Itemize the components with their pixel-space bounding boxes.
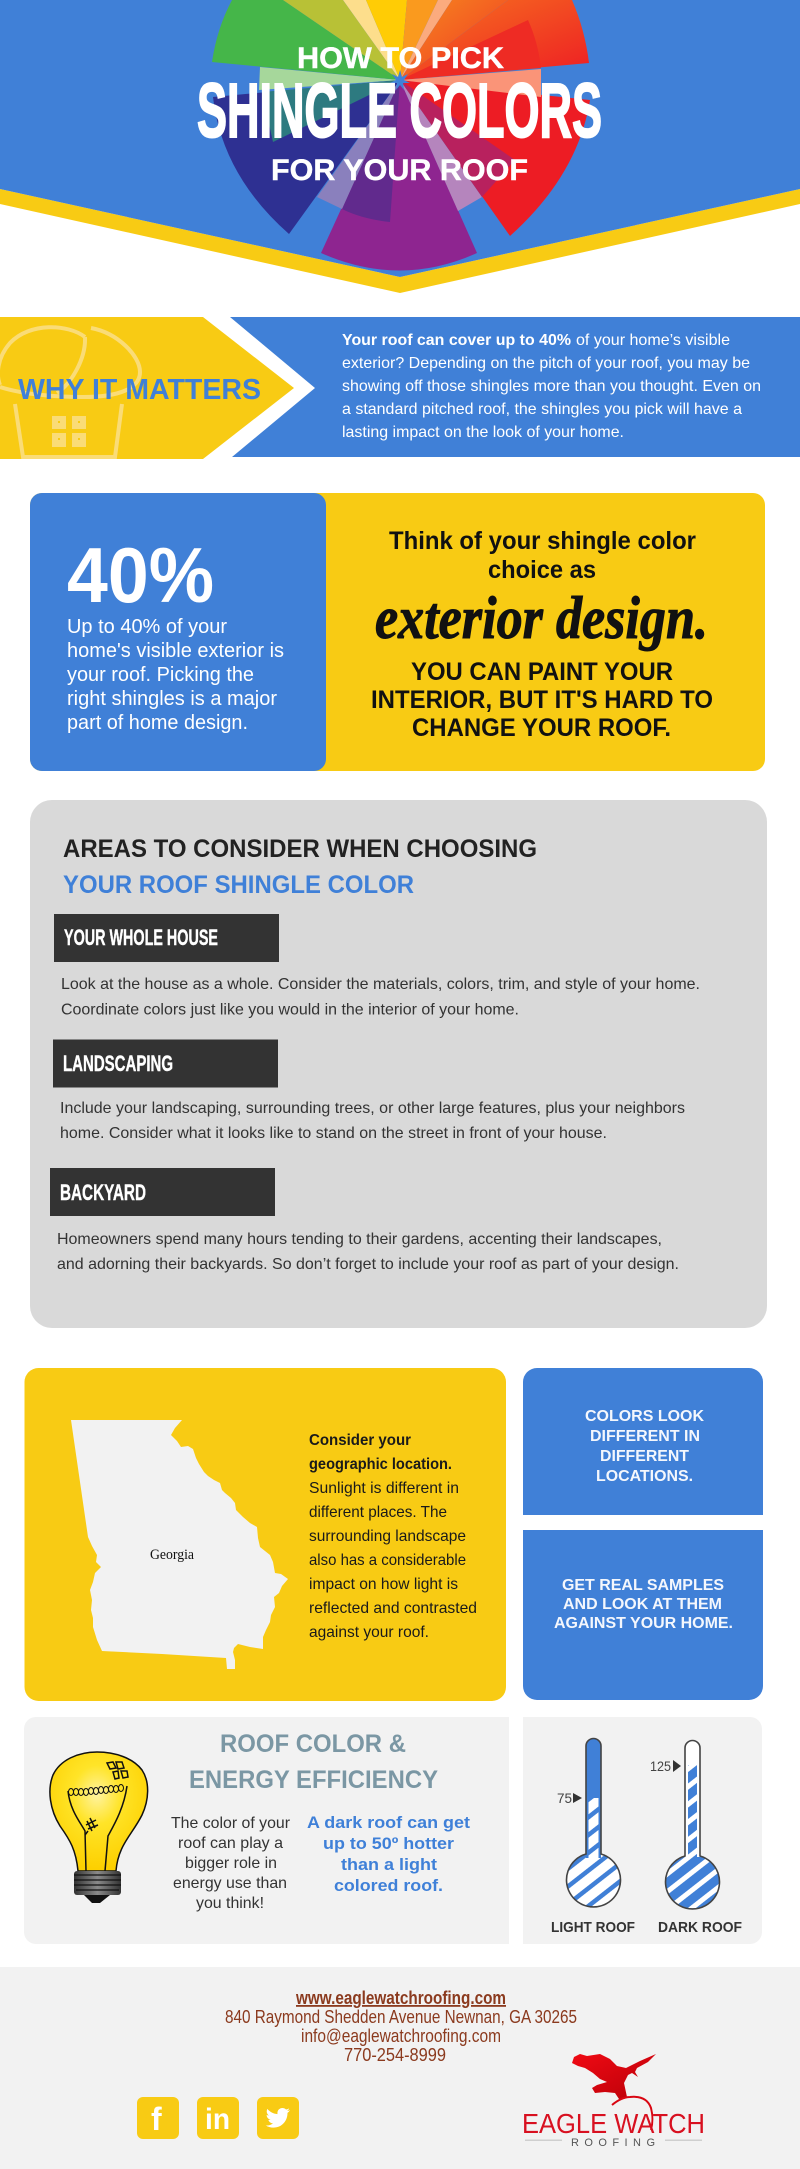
callout: dark roof hotter: A dark roof can get bbox=[307, 1813, 470, 1832]
contact details bbox=[225, 1988, 577, 2065]
icon: linkedin: in bbox=[205, 2103, 230, 2136]
wheel center star bbox=[390, 70, 410, 90]
section: why it matters bbox=[0, 317, 800, 459]
item: your whole house: Look at the house as a whole. Consider the materials, colors, trim, and style of your home. bbox=[61, 976, 700, 993]
logo eagle bbox=[572, 2054, 656, 2099]
geographic text: reflected and contrasted bbox=[309, 1600, 477, 1617]
yellow background bbox=[30, 493, 765, 771]
callout: colors look different: COLORS LOOK bbox=[585, 1408, 704, 1425]
geographic text: geographic location. bbox=[309, 1456, 452, 1473]
exterior design message: exterior design. bbox=[375, 585, 708, 651]
yellow arrow panel bbox=[0, 317, 294, 459]
panel: geographic location bbox=[24, 1368, 506, 1701]
blue stat card bbox=[30, 493, 326, 771]
item: your whole house: Coordinate colors just like you would in the interior of your home. bbox=[61, 1002, 519, 1018]
intro paragraph: of your home’s visible bbox=[576, 332, 730, 349]
item: your whole house bbox=[54, 914, 700, 1018]
thermometer: light roof bbox=[551, 1735, 635, 1936]
banner yellow chevron bbox=[0, 189, 800, 293]
callout: get real samples bbox=[523, 1530, 763, 1700]
contact details: www.eaglewatchroofing.com bbox=[295, 1988, 506, 2008]
icon: facebook: f bbox=[151, 2101, 162, 2137]
item: backyard: and adorning their backyards. So don’t forget to include your roof as part of your design. bbox=[57, 1256, 679, 1273]
callout: dark roof hotter: colored roof. bbox=[334, 1876, 443, 1895]
energy text: roof can play a bbox=[178, 1835, 283, 1852]
item: your whole house: YOUR WHOLE HOUSE bbox=[64, 925, 218, 950]
exterior design message: choice as bbox=[488, 556, 596, 584]
heading: why it matters: WHY IT MATTERS bbox=[18, 374, 261, 406]
geographic text: Consider your bbox=[309, 1432, 411, 1449]
stat description: home's visible exterior is bbox=[67, 640, 284, 662]
blue text panel bbox=[230, 317, 800, 457]
callout: colors look different: DIFFERENT bbox=[600, 1448, 689, 1465]
heading: areas to consider: YOUR ROOF SHINGLE COLOR bbox=[63, 871, 414, 899]
banner blue background bbox=[0, 0, 800, 277]
callout: colors look different: LOCATIONS. bbox=[596, 1468, 693, 1485]
heading: areas to consider bbox=[63, 835, 537, 899]
callout: colors look different: DIFFERENT IN bbox=[590, 1428, 700, 1445]
thermometer: light roof: 75 bbox=[557, 1790, 572, 1806]
callout: dark roof hotter: up to 50º hotter bbox=[323, 1834, 454, 1853]
footer bbox=[0, 1967, 800, 2169]
icon: facebook bbox=[137, 2097, 179, 2139]
exterior design message: Think of your shingle color bbox=[389, 527, 696, 555]
energy text: you think! bbox=[196, 1895, 264, 1912]
title: FOR YOUR ROOF bbox=[271, 154, 528, 187]
intro paragraph: Your roof can cover up to 40% bbox=[342, 332, 571, 349]
intro paragraph bbox=[342, 332, 761, 441]
panel: thermometers bbox=[523, 1717, 762, 1944]
callout: dark roof hotter bbox=[307, 1813, 470, 1895]
title bbox=[197, 42, 602, 187]
energy text: bigger role in bbox=[185, 1855, 277, 1872]
energy text bbox=[171, 1815, 291, 1912]
stat description: right shingles is a major bbox=[67, 688, 277, 710]
geographic text: against your roof. bbox=[309, 1624, 429, 1641]
panel: areas to consider bbox=[30, 800, 767, 1328]
stat description: part of home design. bbox=[67, 712, 248, 734]
contact details: info@eaglewatchroofing.com bbox=[301, 2026, 501, 2046]
intro paragraph: showing off those shingles more than you thought. Even on bbox=[342, 378, 761, 395]
callout: colors look different bbox=[523, 1368, 763, 1515]
logo tagline: ROOFING bbox=[571, 2137, 655, 2149]
icon: house outline bbox=[0, 327, 140, 457]
intro paragraph: exterior? Depending on the pitch of your roof, you may be bbox=[342, 355, 750, 372]
item: backyard bbox=[50, 1168, 679, 1273]
contact details: 840 Raymond Shedden Avenue Newnan, GA 30265 bbox=[225, 2007, 577, 2027]
item: landscaping: Include your landscaping, surrounding trees, or other large features, plus your neighbors bbox=[60, 1100, 685, 1117]
stat description bbox=[67, 616, 284, 734]
geographic text: also has a considerable bbox=[309, 1552, 466, 1569]
energy text: energy use than bbox=[173, 1875, 287, 1892]
geographic text: different places. The bbox=[309, 1504, 447, 1521]
geographic text: Sunlight is different in bbox=[309, 1480, 459, 1497]
contact details: 770-254-8999 bbox=[344, 2045, 446, 2065]
icon: twitter bbox=[257, 2097, 299, 2139]
heading: roof color and energy efficiency bbox=[189, 1730, 438, 1794]
item: backyard: BACKYARD bbox=[60, 1180, 146, 1205]
callout: get real samples: GET REAL SAMPLES bbox=[562, 1577, 724, 1594]
geographic text bbox=[309, 1432, 477, 1641]
thermometer: dark roof bbox=[650, 1735, 742, 1936]
map: Georgia: Georgia bbox=[150, 1547, 194, 1563]
thermometer: dark roof: 125 bbox=[650, 1758, 671, 1774]
color wheel bbox=[212, 0, 590, 270]
stat description: Up to 40% of your bbox=[67, 616, 227, 638]
title: HOW TO PICK bbox=[297, 42, 504, 75]
thermometer: dark roof: DARK ROOF bbox=[658, 1919, 742, 1936]
stat: 40%: 40% bbox=[67, 531, 214, 619]
icon: linkedin bbox=[197, 2097, 239, 2139]
exterior design message: YOU CAN PAINT YOUR bbox=[411, 658, 673, 686]
icon: light bulb bbox=[50, 1752, 148, 1903]
heading: areas to consider: AREAS TO CONSIDER WHEN CHOOSING bbox=[63, 835, 537, 863]
map: Georgia bbox=[71, 1420, 288, 1669]
item: backyard: Homeowners spend many hours tending to their gardens, accenting their landscapes, bbox=[57, 1231, 662, 1248]
callout: get real samples: AGAINST YOUR HOME. bbox=[554, 1615, 733, 1632]
logo wordmark: EAGLE WATCH bbox=[522, 2108, 705, 2139]
heading: roof color and energy efficiency: ENERGY EFFICIENCY bbox=[189, 1766, 438, 1794]
exterior design message bbox=[371, 527, 713, 742]
logo tail swoosh bbox=[612, 2097, 652, 2130]
stat description: your roof. Picking the bbox=[67, 664, 254, 686]
intro paragraph: a standard pitched roof, the shingles you pick will have a bbox=[342, 401, 742, 418]
geographic text: impact on how light is bbox=[309, 1576, 458, 1593]
item: landscaping bbox=[53, 1040, 685, 1142]
intro paragraph: lasting impact on the look of your home. bbox=[342, 424, 624, 441]
callout: get real samples: AND LOOK AT THEM bbox=[563, 1596, 722, 1613]
panel: 40 percent and exterior design bbox=[30, 493, 765, 771]
exterior design message: INTERIOR, BUT IT'S HARD TO bbox=[371, 686, 713, 714]
heading: roof color and energy efficiency: ROOF COLOR & bbox=[220, 1730, 406, 1758]
panel: roof color and energy efficiency bbox=[24, 1717, 509, 1944]
energy text: The color of your bbox=[171, 1815, 291, 1832]
geographic text: surrounding landscape bbox=[309, 1528, 466, 1545]
callout: dark roof hotter: than a light bbox=[341, 1855, 437, 1874]
thermometer: light roof: LIGHT ROOF bbox=[551, 1919, 635, 1936]
item: landscaping: LANDSCAPING bbox=[63, 1051, 173, 1076]
logo: eagle watch roofing bbox=[522, 2054, 705, 2149]
exterior design message: CHANGE YOUR ROOF. bbox=[412, 714, 671, 742]
header banner bbox=[0, 0, 800, 293]
item: landscaping: home. Consider what it looks like to stand on the street in front of your house. bbox=[60, 1125, 607, 1142]
